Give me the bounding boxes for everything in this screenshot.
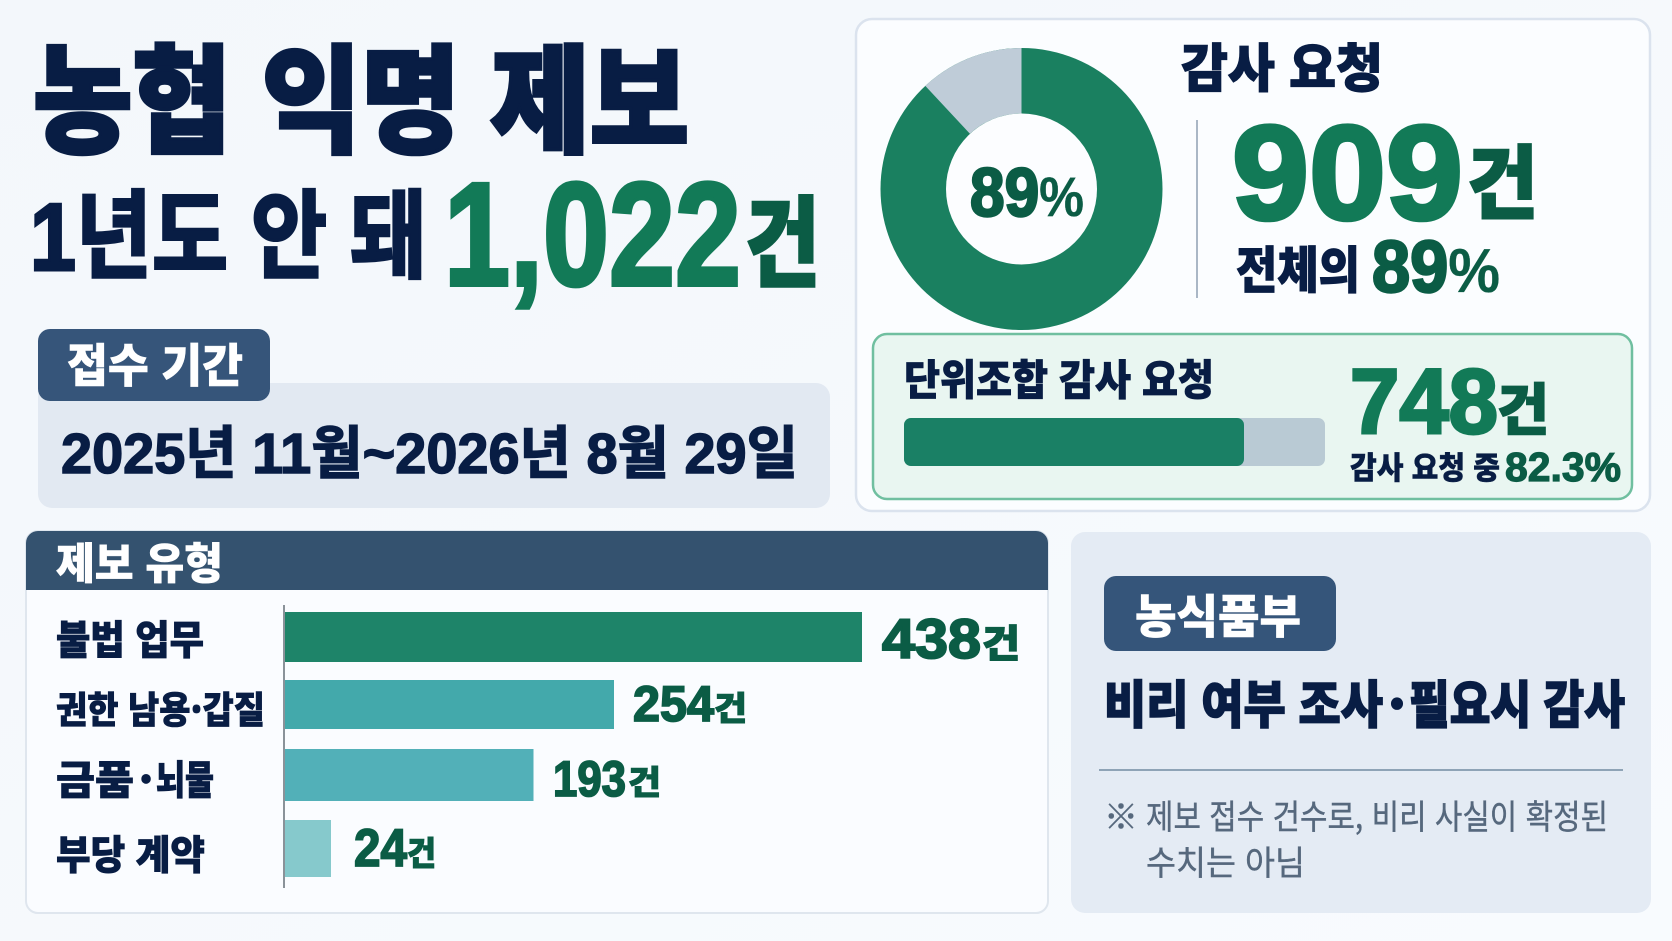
bar: bribery: 금품 [56, 748, 134, 806]
badge: ministry: 농식품부 [1135, 581, 1301, 647]
bar chart [56, 605, 1020, 888]
share: 감사 요청 중 [1350, 443, 1500, 488]
bar: illegal work: 불법 업무 [56, 608, 204, 666]
count: 748 [1350, 351, 1498, 453]
headline number: 1,022 [444, 153, 741, 317]
count: 건 [1497, 366, 1549, 447]
footnote: 제보 접수 건수로, 비리 사실이 확정된 [1146, 790, 1608, 839]
response text: 비리 여부 조사 [1104, 664, 1383, 738]
audit heading: 감사 요청 [1181, 27, 1383, 102]
donut chart: 89% [970, 154, 1084, 231]
panel: ministry response [1071, 532, 1651, 913]
response text: 필요시 감사 [1409, 664, 1625, 738]
bar: abuse of authority [56, 676, 747, 734]
panel: audit requests [856, 19, 1650, 511]
share [1350, 443, 1621, 490]
audit share: 89% [1372, 227, 1500, 308]
bar: abuse of authority: 건 [714, 682, 747, 730]
headline unit: 건 [745, 165, 820, 307]
panel: reception period [38, 329, 830, 508]
panel: tip types [26, 530, 1048, 913]
audit count: 909 [1232, 99, 1463, 248]
bar: illegal work: 438 [882, 607, 981, 670]
panel header [26, 530, 1048, 592]
bar: illegal work: 건 [982, 613, 1020, 668]
audit count: 건 [1467, 120, 1538, 236]
footnote: 수치는 아님 [1146, 836, 1305, 885]
bar: bribery: 뇌물 [156, 748, 214, 806]
divider [1196, 120, 1198, 298]
badge: ministry [1104, 576, 1336, 651]
divider [1099, 769, 1623, 771]
bar: unfair contract: 부당 계약 [56, 823, 205, 881]
period dates: 2025년 11월~2026년 8월 29일 [61, 422, 798, 486]
share: 82.3% [1505, 444, 1621, 490]
bar: illegal work [56, 607, 1020, 670]
footnote: ※ [1104, 790, 1138, 839]
bar: abuse of authority: 권한 남용·갑질 [56, 680, 265, 734]
bar: bribery [56, 748, 661, 807]
badge: reception period: 접수 기간 [67, 330, 243, 396]
title line 2: 1년도 안 돼 [30, 184, 426, 291]
bar: bribery: 193 [553, 751, 626, 807]
title line 1: 농협 익명 제보 [33, 7, 689, 177]
bar: unfair contract [56, 819, 436, 881]
audit share [1236, 227, 1500, 308]
donut chart [880, 48, 1162, 330]
progress bar [904, 418, 1325, 466]
sub heading: 단위조합 감사 요청 [904, 347, 1214, 408]
footnote [1104, 790, 1608, 885]
bar: bribery: 건 [628, 756, 661, 804]
bar: abuse of authority: 254 [633, 676, 714, 732]
audit share: 전체의 [1236, 231, 1360, 303]
response text [1104, 664, 1625, 738]
title [30, 7, 820, 317]
response text: · [1388, 664, 1406, 738]
panel header: 제보 유형 [56, 530, 223, 592]
bar: unfair contract: 24 [354, 819, 407, 878]
bar: bribery: · [139, 748, 153, 806]
panel: unit cooperative audit requests [873, 334, 1632, 499]
bar: unfair contract: 건 [407, 827, 436, 875]
